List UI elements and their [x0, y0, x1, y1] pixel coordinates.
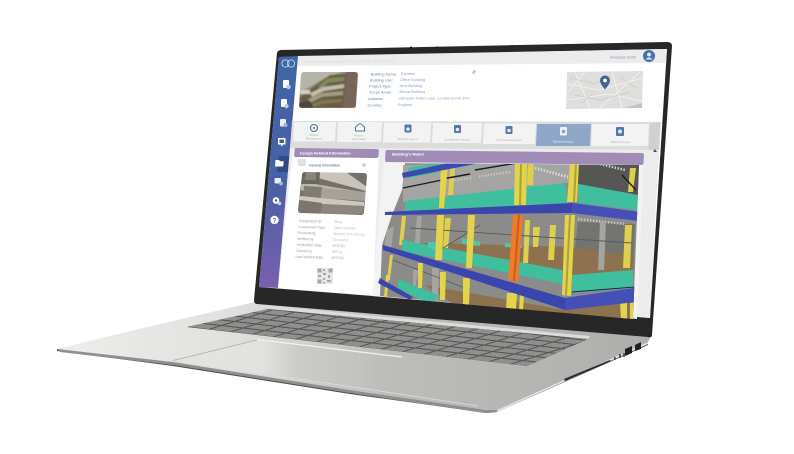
truss beams: [455, 164, 625, 224]
component details: Sling: [334, 220, 342, 224]
active sidebar item: [277, 156, 296, 172]
component details: Productivity: [298, 231, 316, 235]
icon: search list: [274, 178, 283, 185]
tab: construction layout: [432, 123, 482, 143]
building details: Jain-path Fuller Lane, London EC4A 1PE: [398, 96, 470, 100]
tab: project information: Information: [352, 137, 366, 141]
laptop base deck: [57, 302, 651, 413]
building details: England: [398, 102, 412, 107]
component details: Verification Date: [296, 243, 322, 248]
component details: Component Type: [298, 225, 325, 230]
panel heading: [294, 148, 379, 158]
tab: project information: [337, 122, 382, 142]
component thumbnail: [298, 159, 306, 166]
teal wall panels: [398, 163, 638, 304]
general information label: General Information: [309, 164, 340, 168]
panel: building model: [372, 150, 644, 319]
component details: Component ID: [299, 219, 322, 224]
content background: [278, 148, 659, 318]
tab: element layout active: [536, 124, 591, 146]
icon: map pin: [600, 76, 610, 90]
icon: logo: [282, 60, 295, 67]
component details: Owned by: [296, 249, 312, 253]
icon: document one: [283, 80, 291, 89]
component details: Wooden Iron Strong: [333, 232, 365, 237]
top header bar: [297, 49, 667, 66]
tab: building layout: [383, 122, 431, 142]
icon: user avatar: [643, 50, 655, 62]
icon: report: [280, 119, 288, 127]
component details: #FO p.: [332, 250, 343, 254]
building details: Scope Areas:: [369, 90, 392, 94]
panel heading: Building's Model: [392, 152, 424, 156]
building details: Building Name:: [371, 72, 397, 76]
3D building model: [378, 162, 640, 319]
icon: help: [270, 216, 279, 224]
component details: #FO781: [332, 244, 345, 248]
model backdrop: [380, 163, 640, 319]
back yellow columns: [387, 163, 636, 280]
building details: Express: [401, 71, 415, 76]
component details: #FO781: [331, 256, 344, 260]
building details: Project Type:: [369, 84, 392, 88]
icon: edit pencil: [472, 70, 476, 74]
blue floor slabs: [378, 162, 640, 310]
icon: help: ?: [273, 218, 277, 224]
steel beams photo: [298, 172, 367, 215]
tab: building layout: Building Layout: [398, 137, 418, 141]
icon: settings: [273, 197, 281, 205]
grey wiring: [393, 225, 632, 290]
navigation tabs: [290, 121, 661, 150]
sidebar: [259, 56, 298, 288]
panel heading: [385, 150, 644, 165]
project summary: [298, 70, 643, 109]
building details: Country:: [368, 102, 382, 108]
icon: document two: [281, 99, 289, 108]
component details: Steel Material: [334, 226, 355, 230]
panel heading: Design Related Information: [300, 150, 351, 156]
icon: monitor: [278, 138, 286, 146]
trackpad: [173, 340, 478, 406]
tab: material layout: Material Layout: [610, 140, 630, 144]
webcam dots: [410, 45, 513, 48]
building details: Office Building: [400, 77, 425, 82]
panel: design related information: [278, 148, 379, 295]
component details: Structures: [332, 238, 349, 242]
QR code: [317, 268, 333, 284]
column shading: [519, 163, 577, 295]
tab: material layout: [591, 124, 649, 146]
laptop: [57, 42, 672, 413]
top header bar: Home / Building Management / Project Details / Element Layout: [305, 59, 395, 64]
component details: Last Verified Date: [296, 255, 323, 260]
building details: [368, 71, 470, 108]
floor slabs in brown: [420, 243, 634, 319]
side ports: [564, 342, 641, 381]
building details: Building Use:: [370, 78, 393, 82]
icon: folder: [275, 160, 284, 166]
screen bezel: [254, 42, 672, 337]
component details: [296, 219, 365, 261]
front yellow columns: [384, 163, 633, 319]
building details: Below Building: [400, 89, 425, 94]
tab: structural elements: [483, 124, 536, 144]
icon: edit: [362, 162, 366, 168]
screen: [259, 49, 667, 319]
building photo: [298, 71, 360, 109]
grey columns: [384, 162, 606, 302]
tab: structural elements: Structural Elements: [496, 138, 522, 142]
user name: Anastasia Smith: [610, 56, 636, 60]
scrollbar strip: [648, 123, 660, 150]
tab: project management: [293, 122, 336, 142]
location map: [566, 71, 643, 109]
tab: construction layout: Construction Layout: [444, 138, 470, 142]
component details: Verified by: [297, 237, 314, 241]
scroll arrow: [653, 149, 657, 152]
building details: Address:: [368, 96, 383, 101]
keyboard: [187, 306, 590, 366]
building details: New Building: [400, 83, 422, 88]
tab: project management: Management: [306, 136, 322, 140]
palm rest highlight line: [257, 340, 402, 357]
tab: project information: Project: [355, 134, 364, 138]
tab: project management: Project: [310, 133, 319, 137]
black top beams: [403, 163, 636, 190]
orange selected column: [508, 215, 523, 282]
tab: element layout active: Element Layout: [553, 140, 573, 144]
